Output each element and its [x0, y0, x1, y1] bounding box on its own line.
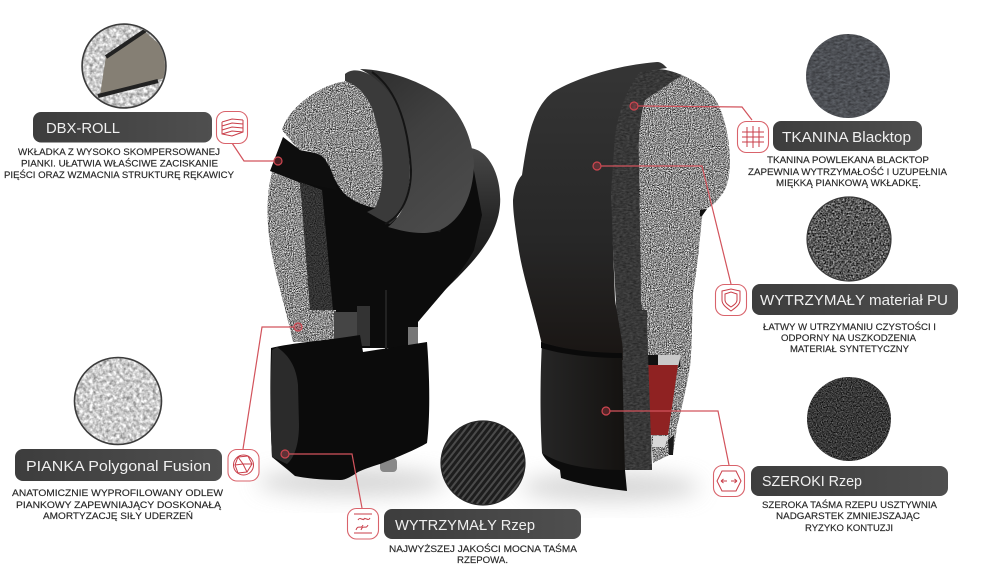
wrist cuff: [270, 335, 429, 480]
fabric strip: [345, 70, 410, 224]
swatch: wide velcro: [807, 377, 891, 461]
silver liner lower: [653, 436, 668, 447]
leader: PIANKA: [243, 323, 302, 449]
description: PIANKA: [12, 488, 224, 522]
icon: width arrows: [714, 466, 744, 496]
pill: DBX-ROLL: [33, 112, 212, 142]
callout: WYTRZYMAŁY materiał PU: [593, 162, 958, 355]
pill: SZEROKI: [751, 466, 948, 496]
description: PIANKA: ANATOMICZNIE WYPROFILOWANY ODLEW: [12, 488, 224, 499]
icon: mesh: [738, 122, 768, 152]
thumb: [400, 148, 500, 325]
DBX-roll strap: [270, 137, 337, 190]
callout: DBX-ROLL: [4, 24, 282, 181]
description: PU: ODPORNY NA USZKODZENIA: [781, 333, 917, 344]
heading: SZEROKI: SZEROKI Rzep: [762, 473, 862, 490]
description: DBX-ROLL: WKŁADKA Z WYSOKO SKOMPERSOWANEJ: [18, 147, 220, 158]
cuff lower hem: [542, 453, 627, 491]
description: TKANINA: ZAPEWNIA WYTRZYMAŁOŚĆ I UZUPEŁNIA: [748, 166, 948, 178]
description: Rzep: NAJWYŻSZEJ JAKOŚCI MOCNA TAŚMA: [389, 543, 578, 555]
heading: PU: WYTRZYMAŁY materiał PU: [760, 292, 948, 309]
description: PU: [763, 321, 936, 355]
description: Rzep: RZEPOWA.: [457, 555, 508, 566]
pill: Rzep: [384, 509, 581, 539]
icon: layered roll: [216, 112, 248, 144]
red insert: [648, 365, 678, 435]
soft floor shadows: [257, 468, 700, 501]
hand opening: [648, 355, 680, 367]
description: PIANKA: AMORTYZACJĘ SIŁY UDERZEŃ: [43, 511, 193, 522]
swatch: foam: [74, 358, 162, 444]
icon: polygon sphere: [228, 450, 259, 481]
description: TKANINA: MIĘKKĄ PIANKOWĄ WKŁADKĘ.: [776, 178, 921, 189]
description: SZEROKI: SZEROKA TAŚMA RZEPU USZTYWNIA: [762, 499, 938, 511]
right boxing glove: [513, 62, 730, 491]
tab behind foam: [700, 209, 707, 216]
leader: DBX-ROLL: [232, 143, 282, 165]
wrist cuff: [540, 342, 625, 470]
leader: Rzep: [281, 450, 362, 508]
leader: PU: [593, 162, 731, 284]
icon: shield: [716, 284, 746, 316]
heading: TKANINA: TKANINA Blacktop: [782, 129, 911, 146]
description: PU: ŁATWY W UTRZYMANIU CZYSTOŚCI I: [763, 321, 936, 333]
callout: TKANINA Blacktop: [630, 34, 948, 189]
heading: Rzep: WYTRZYMAŁY Rzep: [395, 517, 535, 534]
left boxing glove: [268, 69, 500, 480]
foam side: [636, 75, 730, 463]
description: TKANINA: TKANINA POWLEKANA BLACKTOP: [767, 155, 929, 166]
description: PU: MATERIAŁ SYNTETYCZNY: [790, 344, 910, 355]
mesh strip: [610, 69, 682, 470]
leader: SZEROKI: [602, 407, 729, 465]
cuff flap: [270, 347, 299, 464]
pill: PU: [752, 284, 958, 315]
description: DBX-ROLL: PIĘŚCI ORAZ WZMACNIA STRUKTURĘ RĘKAWICY: [4, 169, 235, 181]
swatch: PU leather: [807, 197, 891, 281]
description: DBX-ROLL: [4, 147, 235, 181]
description: SZEROKI: [762, 499, 938, 534]
icon: hook layers: [348, 508, 378, 539]
description: SZEROKI: RYZYKO KONTUZJI: [805, 523, 893, 534]
description: TKANINA: [748, 155, 948, 189]
pill: PIANKA: [15, 449, 222, 481]
leader: TKANINA: [630, 102, 752, 120]
lower tab: [380, 458, 397, 472]
heading: PIANKA: PIANKA Polygonal Fusion: [26, 458, 211, 475]
swatch: DBX-ROLL: [82, 24, 166, 108]
callout: PIANKA Polygonal Fusion: [12, 323, 302, 522]
cuff mesh: [622, 310, 652, 470]
description: Rzep: [389, 543, 578, 566]
silver liner: [658, 355, 681, 367]
upper foam: [282, 81, 385, 208]
swatch: blacktop fabric: [806, 34, 890, 118]
description: SZEROKI: NADGARSTEK ZMNIEJSZAJĄC: [776, 511, 920, 522]
wrist straps: [334, 290, 418, 350]
callout: SZEROKI Rzep: [602, 377, 948, 534]
pill: TKANINA: [773, 121, 922, 151]
swatch: hook tape: [441, 421, 525, 505]
heading: DBX-ROLL: DBX-ROLL: [46, 120, 120, 137]
lower foam: [268, 172, 336, 342]
black tab: [668, 435, 674, 455]
description: PIANKA: PIANKOWY ZAPEWNIAJĄCY DOSKONAŁĄ: [16, 500, 222, 511]
outer shell: [360, 69, 474, 233]
palm body: [298, 160, 482, 348]
callout: WYTRZYMAŁY Rzep: [281, 421, 581, 566]
mesh band: [300, 182, 333, 310]
description: DBX-ROLL: PIANKI. UŁATWIA WŁAŚCIWE ZACISKANIE: [21, 158, 218, 170]
shell: [513, 62, 667, 360]
